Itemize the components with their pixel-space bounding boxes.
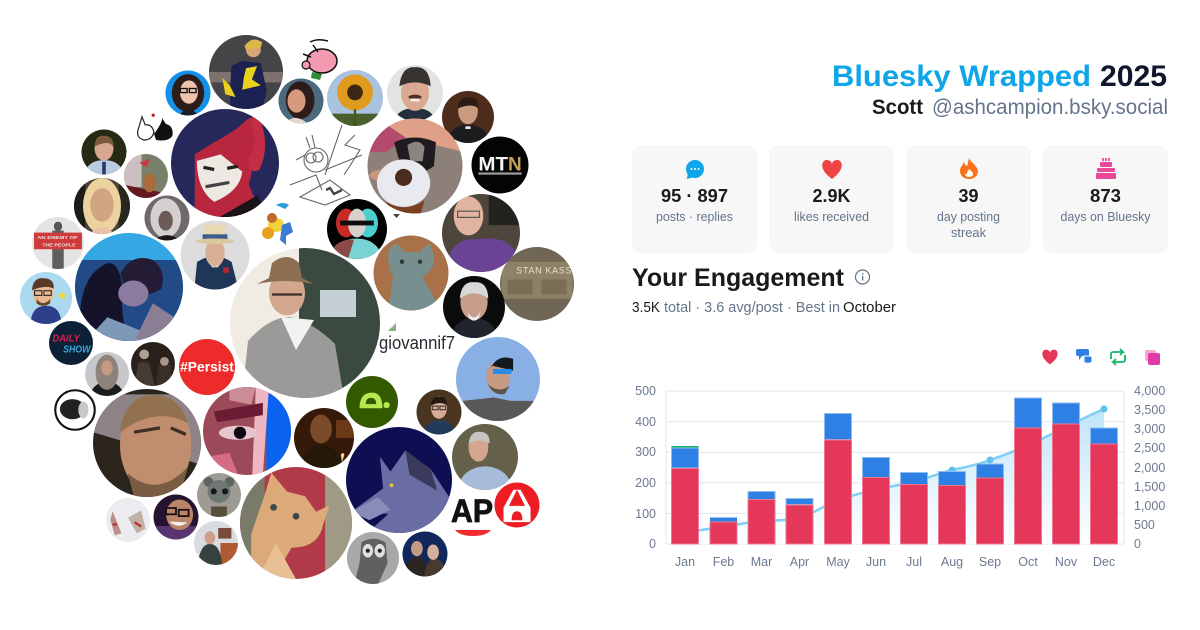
- avatar: robot mouse statue: [197, 473, 241, 517]
- icon: chat bubble: [686, 160, 704, 179]
- left axis labels: 0: [649, 537, 656, 551]
- left axis labels: 300: [635, 445, 656, 459]
- avatar: man by candlelight: [294, 408, 354, 468]
- legend: reposts arrows: [1111, 349, 1125, 365]
- right axis labels: 3,000: [1134, 422, 1165, 436]
- avatar: bunny sticker: [137, 114, 173, 141]
- icon: flame: [960, 158, 978, 179]
- left axis labels: 500: [635, 384, 656, 398]
- right axis labels: [1134, 384, 1165, 551]
- avatar: Stan Kass grave plaque: STAN KASS: [516, 266, 572, 276]
- avatar: green logo: [346, 376, 398, 428]
- right axis labels: 0: [1134, 537, 1141, 551]
- avatar: Daily Show logo: SHOW: [63, 344, 91, 356]
- avatar: MTN logo: N: [508, 154, 522, 176]
- avatar: Persist badge: [179, 339, 235, 395]
- left axis labels: 200: [635, 476, 656, 490]
- chart legend: [1042, 349, 1160, 365]
- month labels: Sep: [979, 555, 1001, 569]
- left axis labels: [635, 384, 656, 551]
- month labels: May: [826, 555, 851, 569]
- month labels: [675, 555, 1115, 569]
- avatar: cartoon woman with glasses: [166, 70, 210, 116]
- stat card: posts and replies: 95 · 897: [661, 185, 728, 206]
- stat card: day posting streak: day posting: [937, 210, 1000, 224]
- avatar: horses in snow: [106, 498, 150, 542]
- avatar: AP logo: AP: [451, 493, 493, 529]
- avatar: man with beanie: [387, 65, 443, 121]
- right axis labels: 500: [1134, 518, 1155, 532]
- user name and handle: @ashcampion.bsky.social: [932, 96, 1168, 119]
- stat card: days on Bluesky: 873: [1090, 185, 1121, 206]
- avatar: main man in hat and suit: [230, 248, 380, 398]
- avatar: 3D glasses man: [327, 199, 387, 259]
- stat card: day posting streak: [906, 145, 1031, 253]
- month labels: Jul: [906, 555, 922, 569]
- avatar: priest: [442, 91, 494, 143]
- avatar: sepia old photo: [131, 342, 175, 386]
- avatar: man in sunglasses under blue sky: [456, 337, 540, 421]
- avatar: blonde woman: [74, 178, 130, 234]
- legend: replies chat: [1076, 349, 1092, 365]
- avatar: Persist badge: #Persist: [180, 359, 234, 374]
- avatar: Stan Kass grave plaque: [500, 247, 574, 321]
- stat card: posts and replies: posts · replies: [656, 210, 733, 224]
- right axis labels: 4,000: [1134, 384, 1165, 398]
- month labels: Mar: [751, 555, 772, 569]
- avatar: cat in window: [124, 154, 168, 198]
- avatar: line sketch figure: [290, 125, 362, 205]
- avatar: grey cat: [374, 236, 448, 310]
- avatar: man in purple shirt: [442, 194, 520, 272]
- stat card: day posting streak: 39: [958, 185, 978, 206]
- month labels: Jun: [866, 555, 886, 569]
- avatar: smiling man in glasses: [154, 494, 198, 540]
- stat card: days on Bluesky: days on Bluesky: [1060, 210, 1151, 224]
- avatar: wolf: [346, 427, 452, 533]
- right axis labels: 2,500: [1134, 441, 1165, 455]
- avatar: long-haired man: [85, 352, 129, 396]
- avatar: Uncle Sam: [180, 220, 250, 290]
- stat card: likes received: [769, 145, 894, 253]
- stat card: likes received: likes received: [794, 210, 869, 224]
- chart gridlines and axes: [666, 391, 1124, 544]
- avatar: man in bookshelf study: [416, 390, 462, 434]
- left axis labels: 100: [635, 507, 656, 521]
- avatar: enemy of the people: THE PEOPLE: [42, 243, 76, 248]
- avatar: man in shop: [194, 521, 238, 565]
- avatar: orange kitten: [240, 467, 354, 579]
- engagement summary: 3.5K: [632, 300, 660, 316]
- avatar: selfie man: [93, 389, 201, 497]
- avatar: Gaston cartoon: [302, 40, 337, 80]
- avatar: cartoon memoji: [20, 272, 72, 324]
- avatar: devil cartoon: [171, 109, 279, 217]
- avatar: sunflower: [327, 70, 383, 126]
- right axis labels: 1,500: [1134, 480, 1165, 494]
- avatar: older man in blue shirt: [452, 424, 518, 490]
- avatar: red A logo: [494, 482, 540, 528]
- month labels: Feb: [713, 555, 734, 569]
- engagement summary: total · 3.6 avg/post · Best in: [664, 300, 840, 316]
- avatar: Daily Show logo: DAILY: [53, 332, 81, 344]
- bubble cluster of top interactions: [20, 35, 574, 584]
- user name and handle: Scott: [872, 96, 923, 119]
- cumulative area and line: [685, 406, 1108, 544]
- icon: info: [856, 270, 870, 284]
- stat card: likes received: 2.9K: [812, 185, 851, 206]
- avatar: black ring portrait: [54, 389, 96, 431]
- heading: Your Engagement: Your Engagement: [632, 264, 845, 292]
- legend: likes heart: [1042, 350, 1058, 364]
- title: 2025: [1100, 60, 1167, 93]
- right axis labels: 1,000: [1134, 499, 1165, 513]
- month labels: Oct: [1018, 555, 1038, 569]
- legend: quotes squares: [1145, 350, 1160, 365]
- avatar: grey-haired woman: [144, 196, 190, 240]
- stat card: day posting streak: streak: [951, 226, 987, 240]
- month labels: Aug: [941, 555, 963, 569]
- icon: birthday cake: [1096, 158, 1116, 179]
- month labels: Nov: [1055, 555, 1078, 569]
- avatar: Pooh and Christopher Robin cartoon: [262, 203, 293, 245]
- username fallback text: giovannif7: [379, 333, 455, 353]
- icon: heart: [822, 160, 842, 179]
- avatar: MTN logo: [472, 136, 528, 194]
- avatar: older man with white beard: [443, 276, 505, 338]
- broken image icon above username: [388, 323, 396, 331]
- avatar: dog with donut: [368, 118, 462, 214]
- avatar: Daily Show logo: [49, 321, 93, 365]
- avatar: MTN logo: MT: [478, 154, 508, 176]
- small broken image icon: [393, 214, 400, 218]
- stacked monthly bars: [672, 398, 1118, 544]
- right axis labels: 3,500: [1134, 403, 1165, 417]
- avatar: posterized eye: [203, 387, 291, 475]
- avatar: superhero figure: [209, 35, 283, 109]
- avatar: kissing couple: [75, 233, 183, 341]
- avatar: man with tie: [82, 130, 126, 174]
- engagement summary: [632, 300, 896, 316]
- month labels: Apr: [790, 555, 809, 569]
- engagement bar and line chart: [635, 384, 1165, 569]
- avatar: woman surprised: [278, 78, 324, 124]
- month labels: Dec: [1093, 555, 1115, 569]
- avatar: enemy of the people: [32, 217, 84, 269]
- engagement summary: October: [843, 300, 896, 316]
- avatar: enemy of the people: AN ENEMY OF: [37, 235, 78, 240]
- stat card: days on Bluesky: [1043, 145, 1168, 253]
- avatar: owl: [347, 532, 399, 584]
- month labels: Jan: [675, 555, 695, 569]
- right axis labels: 2,000: [1134, 461, 1165, 475]
- left axis labels: 400: [635, 415, 656, 429]
- title: Bluesky Wrapped: [832, 60, 1091, 93]
- stat card: posts and replies: [632, 145, 757, 253]
- avatar: two men against curtain: [402, 532, 448, 576]
